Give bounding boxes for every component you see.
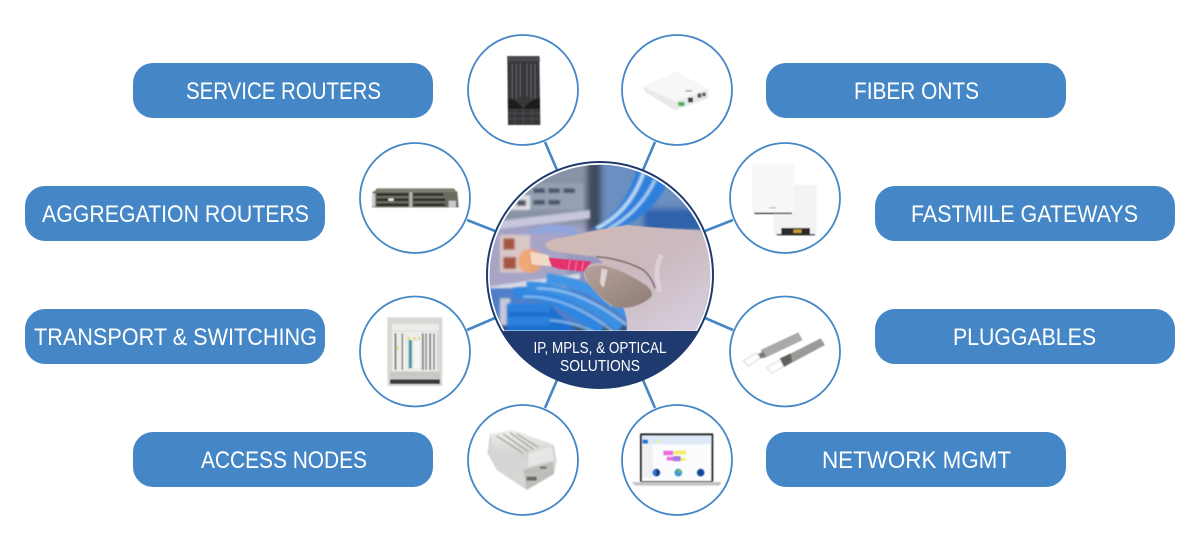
caption band — [502, 331, 698, 388]
pill: access nodes — [133, 432, 433, 487]
central photo: hand plugging a cable — [490, 164, 710, 331]
hand holding connector — [545, 225, 712, 332]
caption band: IP, MPLS, & OPTICAL — [534, 340, 667, 357]
pill: fiber onts: FIBER ONTS — [854, 78, 979, 105]
pill: fastmile gateways — [875, 186, 1175, 241]
pill: transport and switching — [25, 309, 325, 364]
circle: fastmile gateways device — [730, 143, 840, 253]
pill: pluggables — [875, 309, 1175, 364]
pill: pluggables: PLUGGABLES — [953, 324, 1096, 351]
caption band: SOLUTIONS — [560, 358, 640, 375]
pill: aggregation routers — [25, 186, 325, 241]
pill: fiber onts — [766, 63, 1066, 118]
circle: transport and switching shelf — [360, 296, 470, 406]
circle: aggregation router device — [360, 143, 470, 253]
pill: fastmile gateways: FASTMILE GATEWAYS — [911, 201, 1138, 228]
pill: network mgmt — [766, 432, 1066, 487]
pill: aggregation routers: AGGREGATION ROUTERS — [42, 201, 309, 228]
pill: transport and switching: TRANSPORT & SWITCHING — [34, 324, 317, 351]
central circle: IP, MPLS and optical solutions — [480, 155, 720, 388]
circle: fiber ont device — [622, 35, 732, 145]
pill: service routers — [133, 63, 433, 118]
circle: service router device — [468, 35, 578, 145]
pill: network mgmt: NETWORK MGMT — [822, 447, 1011, 474]
circle: access node device — [468, 405, 578, 515]
circle: pluggable transceivers — [730, 296, 840, 406]
pill: service routers: SERVICE ROUTERS — [186, 78, 381, 105]
pill: access nodes: ACCESS NODES — [201, 447, 367, 474]
connector lines — [467, 142, 733, 408]
circle: network management laptop — [622, 405, 732, 515]
network cable connector — [530, 252, 592, 272]
